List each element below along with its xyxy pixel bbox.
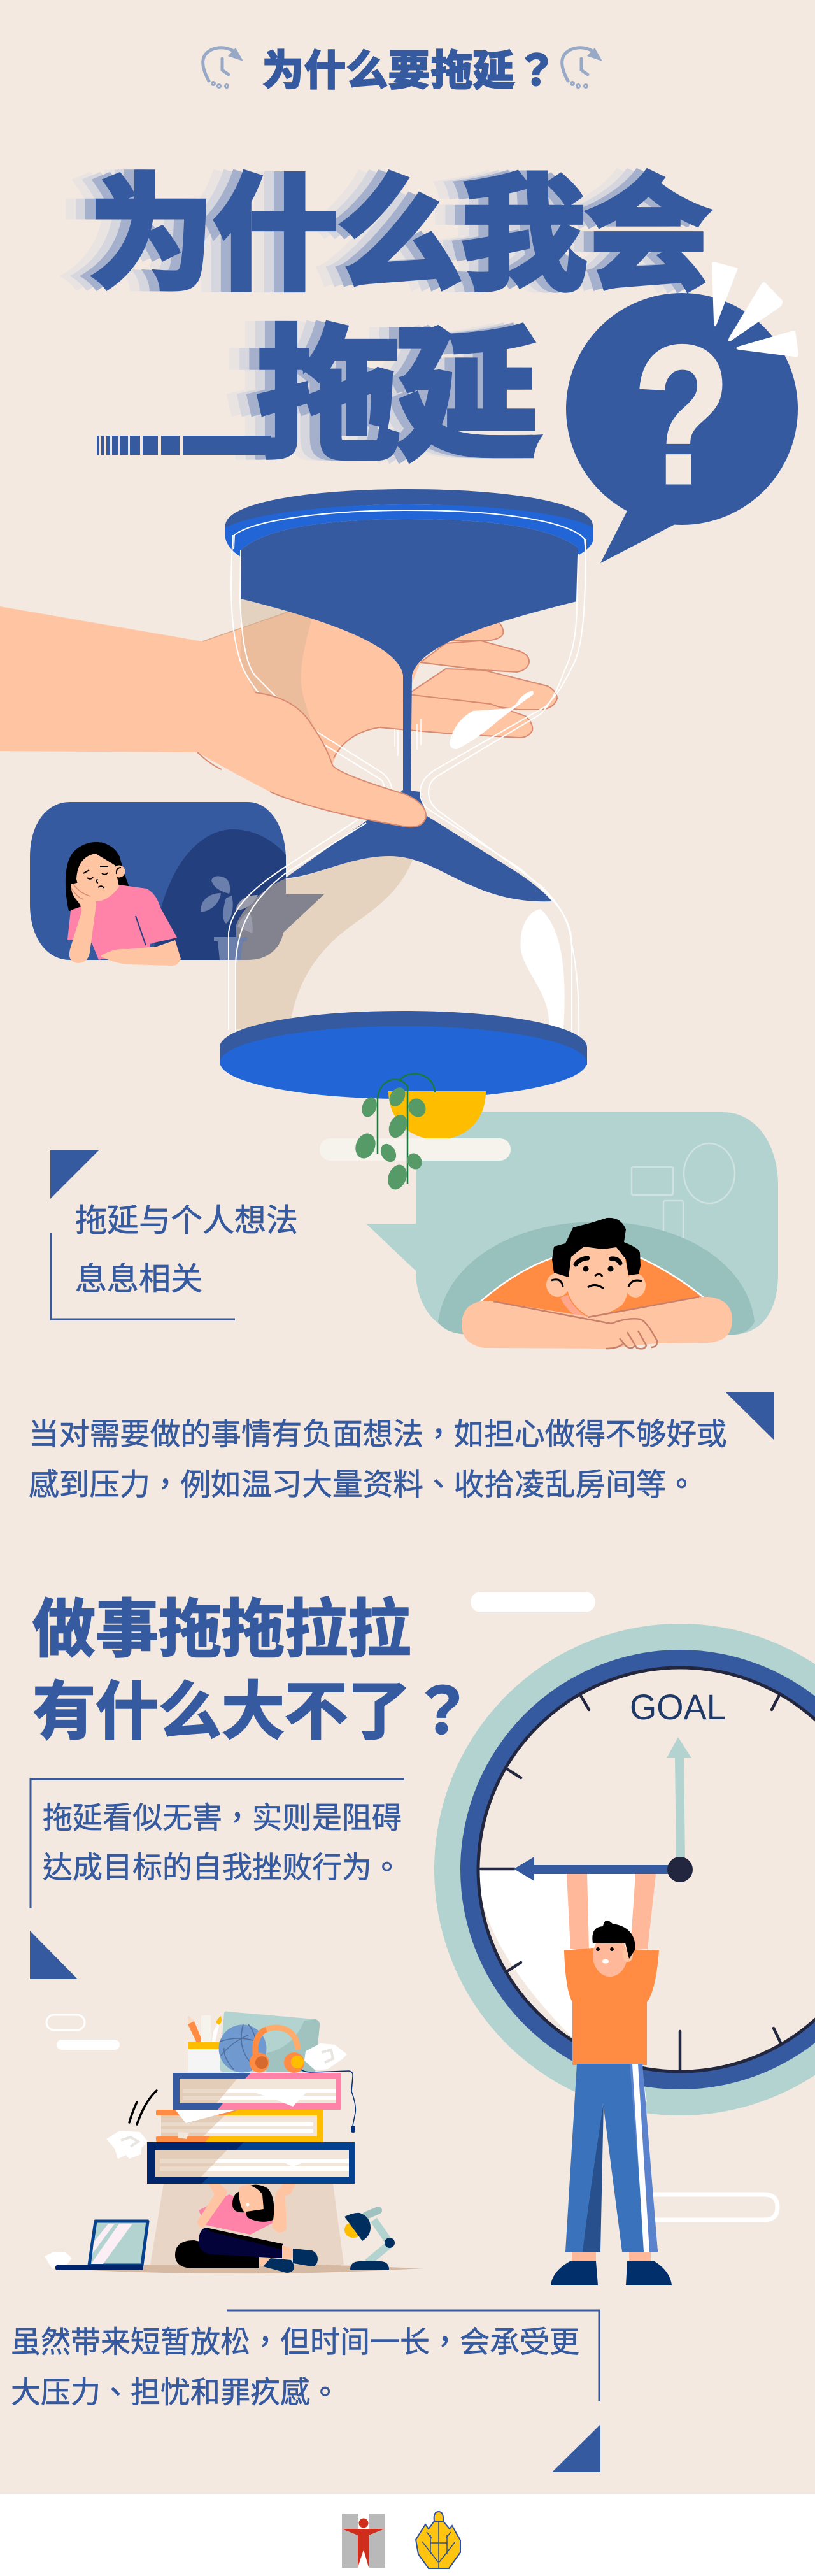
heading: section two <box>32 1594 474 1747</box>
shoes <box>551 2261 598 2285</box>
hair <box>552 1218 641 1277</box>
ankles <box>572 2252 596 2268</box>
book bottom <box>147 2142 355 2184</box>
illustration: book pile <box>45 2011 423 2273</box>
hour hand <box>514 1857 678 1881</box>
speech bubble with question mark: ? <box>634 306 730 524</box>
outlined pill behind person <box>637 2194 777 2220</box>
header title: 为什么要拖延？ <box>262 47 557 94</box>
main title line 2: 拖延 <box>227 317 510 476</box>
panel: girl window <box>30 802 286 960</box>
crumpled paper right <box>304 2043 347 2070</box>
hourglass lower shadow <box>236 856 413 1030</box>
hourglass top cap <box>225 489 593 557</box>
main title line 1: 为什么我会 <box>89 166 711 305</box>
text block: long-term consequences: 大压力、担忧和罪疚感。 <box>11 2375 340 2409</box>
arms <box>567 1874 656 1949</box>
headphones <box>255 2028 298 2054</box>
hand: palm and fingers <box>0 606 557 771</box>
clock <box>434 1624 815 2115</box>
desk lamp <box>344 2210 395 2270</box>
girl under books <box>175 2184 318 2273</box>
headphone cable <box>301 2070 355 2133</box>
motion lines <box>129 2091 157 2124</box>
footer <box>0 2494 815 2576</box>
hourglass lower sand <box>285 790 552 901</box>
wall frames <box>632 1143 735 1241</box>
small pills <box>46 2015 120 2050</box>
main title line 2: 拖延 <box>237 317 520 476</box>
crumpled paper left <box>45 2131 148 2269</box>
yarn ball <box>219 2024 266 2073</box>
illustration: sleepy girl <box>66 842 181 966</box>
shirt <box>564 1948 659 2065</box>
heading: section two: 做事拖拖拉拉 <box>32 1594 411 1664</box>
callout: thoughts <box>50 1150 298 1319</box>
arms <box>462 1297 732 1349</box>
book top <box>173 2073 341 2110</box>
pillow <box>220 2011 320 2072</box>
text block: negative thoughts: 当对需要做的事情有负面想法，如担心做得不够好或 <box>29 1418 727 1452</box>
text block: long-term consequences <box>11 2310 600 2472</box>
icon: clock right <box>562 48 602 87</box>
heading: section two: 有什么大不了？ <box>32 1676 474 1747</box>
panel tint seen through glass <box>236 878 325 960</box>
person hanging on clock hand <box>514 1857 693 2285</box>
text block: long-term consequences: 虽然带来短暂放松，但时间一长，会承受更 <box>11 2325 579 2359</box>
book middle <box>156 2110 323 2142</box>
pants <box>565 2064 658 2252</box>
icon: plant <box>201 876 258 960</box>
floor and light <box>48 2265 423 2273</box>
goal label: GOAL <box>630 1687 726 1727</box>
teal minute hand <box>667 1737 691 1860</box>
laptop <box>55 2221 148 2270</box>
title base bar <box>97 436 271 455</box>
speech bubble with question mark <box>566 262 798 563</box>
hanging plant <box>320 1074 511 1192</box>
pen cup <box>188 2016 202 2042</box>
clock ticks <box>481 1695 781 2070</box>
hourglass upper shadow <box>241 599 322 742</box>
main title line 1: 为什么我会 <box>69 166 691 305</box>
logo: health bureau <box>342 2514 385 2568</box>
main title line 2: 拖延 <box>247 317 530 476</box>
hand: thumb <box>191 692 426 827</box>
hourglass upper sand <box>241 519 578 792</box>
text block: negative thoughts: 感到压力，例如温习大量资料、收拾凌乱房间等。 <box>29 1468 697 1502</box>
text block: self-defeating: 拖延看似无害，实则是阻碍 <box>43 1801 402 1835</box>
main title line 1: 为什么我会 <box>59 166 681 305</box>
callout: thoughts: 拖延与个人想法 <box>75 1203 298 1238</box>
shirt <box>481 1258 703 1319</box>
hourglass glass outline <box>229 535 586 1038</box>
white pill <box>471 1592 595 1612</box>
callout: thoughts: 息息相关 <box>75 1261 202 1297</box>
logo: hands <box>416 2512 460 2568</box>
main title line 1: 为什么我会 <box>79 166 700 305</box>
text block: negative thoughts <box>29 1392 774 1502</box>
main title line 2: 拖延 <box>257 317 540 476</box>
hourglass bottom cap <box>220 1011 587 1099</box>
illustration: worried man panel <box>366 1112 778 1349</box>
text block: self-defeating <box>30 1779 404 1979</box>
hourglass highlights <box>450 691 565 1030</box>
icon: clock left <box>203 48 243 87</box>
text block: self-defeating: 达成目标的自我挫败行为。 <box>43 1850 402 1884</box>
